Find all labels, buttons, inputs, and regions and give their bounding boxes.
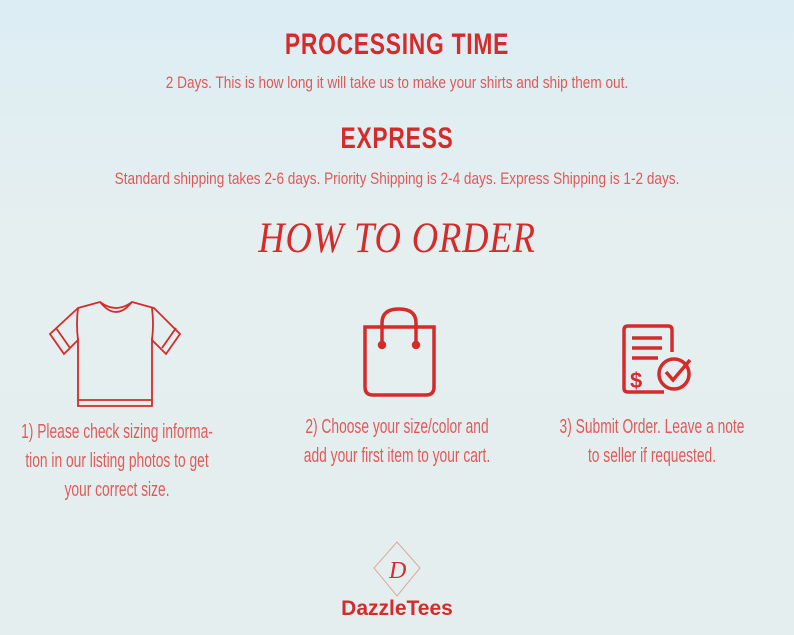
text: processing time detail: 2 Days. This is how long it will take us to make your shirts and ship them out. xyxy=(166,73,628,92)
text: step 3: to seller if requested. xyxy=(588,445,716,467)
logo: DazzleTees: D xyxy=(388,558,406,584)
text: step 1: your correct size. xyxy=(64,479,170,501)
text: step 3: 3) Submit Order. Leave a note xyxy=(560,416,744,438)
text: step 1: tion in our listing photos to get xyxy=(25,450,209,472)
icon: order document with check xyxy=(622,324,692,394)
text: step 2: 2) Choose your size/color and xyxy=(305,416,489,438)
heading: express: EXPRESS xyxy=(340,122,454,155)
heading: processing time: PROCESSING TIME xyxy=(285,28,509,61)
icon: t-shirt xyxy=(48,301,182,407)
text: step 2 xyxy=(304,416,490,467)
text: step 2: add your first item to your cart. xyxy=(304,445,490,467)
text: step 3 xyxy=(560,416,744,467)
logo: DazzleTees: DazzleTees xyxy=(341,597,453,620)
text: step 1 xyxy=(21,421,213,501)
logo: DazzleTees xyxy=(341,541,453,620)
text: step 1: 1) Please check sizing informa- xyxy=(21,421,213,443)
text: express detail: Standard shipping takes 2-6 days. Priority Shipping is 2-4 days. Express Shipping is 1-2 days. xyxy=(115,169,679,188)
heading: how to order: HOW TO ORDER xyxy=(258,215,536,262)
icon: order document with check: $ xyxy=(630,368,642,393)
icon: shopping bag xyxy=(363,307,436,397)
